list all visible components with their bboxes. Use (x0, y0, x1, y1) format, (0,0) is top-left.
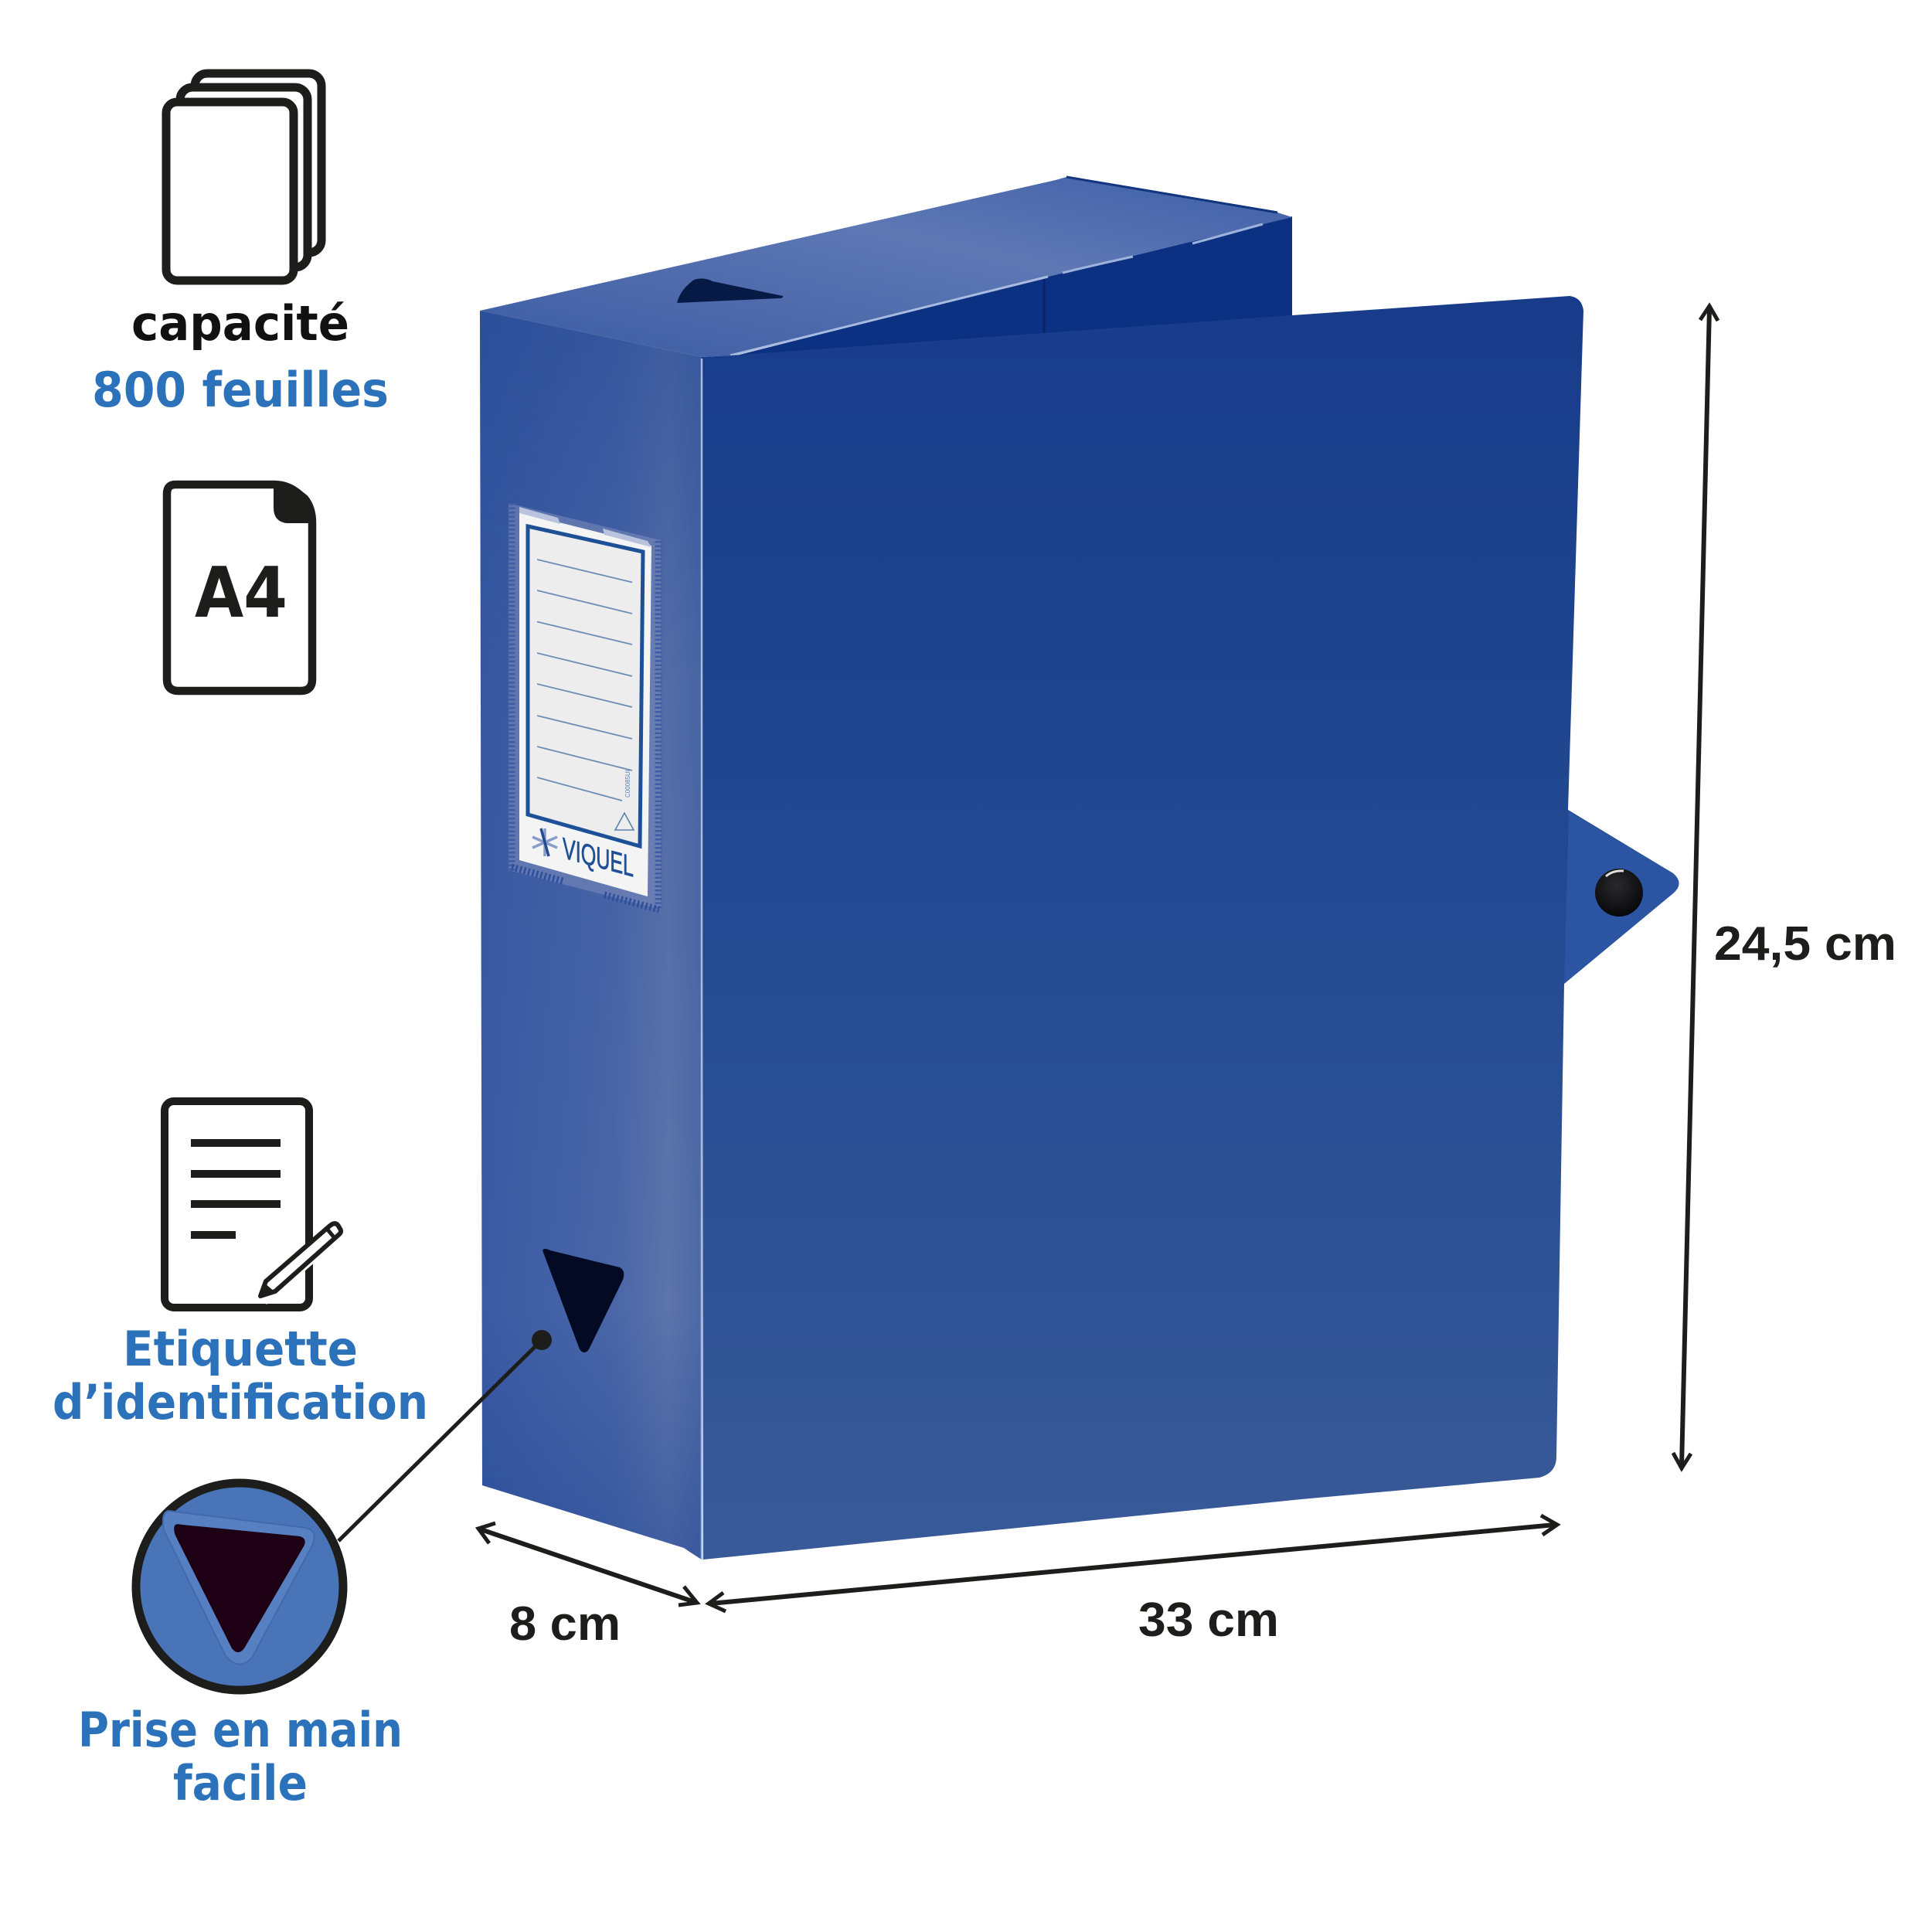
arrow: width (709, 1515, 1557, 1611)
heading: Prise en main facile: Prise en main (78, 1702, 403, 1758)
clear tabs (519, 507, 651, 547)
brand logo (532, 828, 634, 883)
icon: A4 document: A4 (195, 553, 287, 634)
arrow: depth (478, 1523, 697, 1605)
heading: Etiquette d'identification (53, 1321, 428, 1430)
heading: Etiquette d'identification: Etiquette (123, 1321, 358, 1377)
label card (519, 512, 651, 896)
rivet (1595, 869, 1643, 917)
callout line to hand hole (338, 1330, 552, 1541)
icon: stack of sheets (166, 73, 321, 281)
dimension: 33 cm: 33 cm (1138, 1594, 1279, 1647)
dimension: 24,5 cm: 24,5 cm (1714, 917, 1896, 971)
label holder (509, 503, 661, 910)
box spine (480, 311, 702, 1560)
icon: A4 document (167, 485, 316, 691)
heading: capacité: capacité (131, 295, 349, 352)
recycling mark and code: C00085UI (624, 770, 631, 798)
heading: Prise en main facile (78, 1702, 403, 1811)
brand logo: VIQUEL (563, 832, 634, 883)
hand hole: top (677, 278, 783, 303)
text: 800 feuilles: 800 feuilles (92, 362, 389, 418)
box lid top (480, 177, 1292, 357)
box front panel with tab (702, 296, 1679, 1560)
arrow: height (1673, 306, 1718, 1468)
dimension: 8 cm: 8 cm (509, 1597, 621, 1651)
recycling mark and code (615, 770, 634, 830)
hand hole: spine (543, 1249, 624, 1352)
icon: label document with pencil (165, 1101, 348, 1308)
heading: Etiquette d'identification: d’identification (53, 1374, 428, 1430)
heading: Prise en main facile: facile (173, 1755, 308, 1811)
icon: zoomed hand hole circle (136, 1483, 343, 1690)
product: archive box (480, 177, 1679, 1560)
box interior (730, 216, 1292, 363)
